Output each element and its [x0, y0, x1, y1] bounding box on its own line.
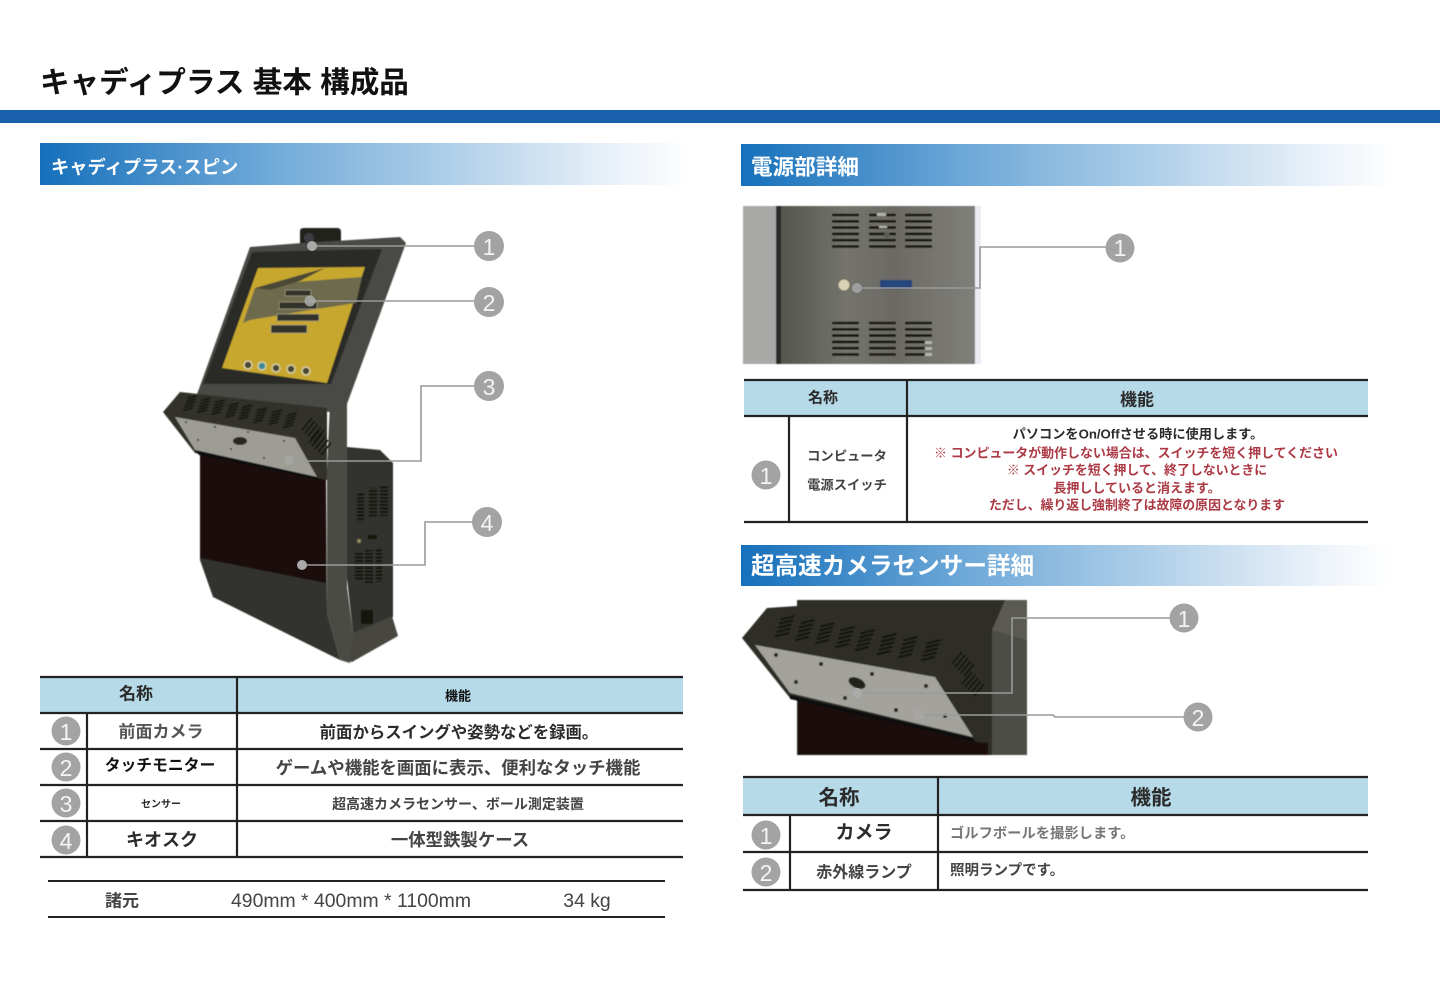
spec row: 34 kg	[563, 890, 611, 912]
table: camera sensor: 1	[760, 823, 772, 849]
table: kiosk components: 機能	[445, 688, 471, 704]
table: power switch: パソコンをOn/Offさせる時に使用します。	[1013, 426, 1263, 442]
callout badge: sensor 1	[1170, 604, 1198, 632]
table: kiosk components: センサー	[141, 798, 181, 810]
table: kiosk components: 前面からスイングや姿勢などを録画。	[320, 723, 598, 742]
callout badge 1: 1	[483, 234, 495, 260]
callout badge 4	[472, 507, 502, 537]
callout badge 2: 2	[483, 290, 495, 316]
lower body	[200, 453, 340, 660]
sensor vents	[183, 396, 331, 455]
table: power switch: ※ スイッチを短く押して、終了しないときに	[1007, 462, 1267, 478]
panel: camera sensor photo	[742, 600, 1184, 755]
table: kiosk components: タッチモニター	[105, 756, 215, 774]
table: kiosk components: 4	[60, 828, 73, 854]
table: kiosk components: 名称	[119, 684, 153, 704]
panel: left section heading	[40, 143, 692, 185]
panel: power section heading	[741, 144, 1395, 186]
side vents	[355, 486, 388, 624]
table: camera sensor	[743, 777, 1368, 890]
panel: kiosk photo	[163, 228, 406, 663]
icon: camera	[300, 228, 341, 247]
table: power switch	[744, 380, 1368, 522]
panel: power switch photo	[743, 206, 1106, 364]
table: power switch: 名称	[808, 388, 838, 406]
callout badge 3	[474, 371, 504, 401]
table: kiosk components: 2	[60, 755, 72, 781]
table: camera sensor: 2	[760, 860, 772, 886]
callout badge 3: 3	[483, 374, 495, 400]
panel: power section heading: 電源部詳細	[751, 154, 859, 180]
column	[327, 402, 353, 663]
table: camera sensor: ゴルフボールを撮影します。	[950, 824, 1134, 842]
spec row: 諸元	[105, 892, 139, 910]
sensor housing	[163, 392, 327, 480]
callout badge 4: 4	[481, 510, 494, 536]
base	[345, 616, 398, 662]
table: power switch: コンピュータ	[807, 448, 887, 464]
table: power switch: 長押ししていると消えます。	[1053, 480, 1221, 496]
screen	[222, 267, 365, 383]
sensor screws	[185, 421, 285, 459]
panel: camera sensor section heading: 超高速カメラセンサー詳細	[751, 553, 1034, 580]
table: camera sensor: 照明ランプです。	[950, 862, 1064, 879]
sensor housing	[742, 606, 992, 743]
screen icons	[244, 361, 310, 375]
table: camera sensor: 赤外線ランプ	[816, 862, 912, 882]
table: kiosk components	[40, 677, 683, 857]
callout badge: sensor 2: 2	[1192, 705, 1204, 731]
callout badge 1	[474, 231, 504, 261]
callout lines: kiosk	[284, 241, 476, 570]
table: kiosk components: 超高速カメラセンサー、ボール測定装置	[332, 796, 584, 812]
table: camera sensor: カメラ	[835, 822, 893, 844]
table: power switch: ※ コンピュータが動作しない場合は、スイッチを短く押してください	[934, 446, 1338, 460]
table: power switch: 1	[760, 463, 772, 489]
menu	[271, 290, 319, 333]
screws	[774, 653, 947, 718]
table: kiosk components: 3	[60, 791, 72, 817]
table: kiosk components: キオスク	[126, 830, 198, 850]
table: kiosk components: 1	[60, 719, 72, 745]
sensor plate	[755, 645, 973, 737]
spec row	[48, 881, 665, 917]
spec row: 490mm * 400mm * 1100mm	[231, 890, 471, 912]
side box	[345, 447, 393, 633]
vent highlights	[877, 213, 932, 356]
panel: camera sensor section heading	[741, 545, 1391, 586]
callout badge: power 1: 1	[1114, 235, 1126, 261]
bezel	[203, 249, 382, 384]
table: camera sensor: 名称	[818, 786, 860, 810]
callout badge: sensor 2	[1184, 702, 1212, 732]
table: power switch: 機能	[1120, 390, 1154, 410]
table: kiosk components: 一体型鉄製ケース	[391, 830, 529, 850]
table: kiosk components: ゲームや機能を画面に表示、便利なタッチ機能	[276, 758, 640, 778]
table: kiosk components: 前面カメラ	[118, 722, 204, 742]
panel: left section heading: キャディプラス·スピン	[51, 156, 238, 178]
sensor vents	[775, 616, 984, 696]
header bar	[0, 110, 1440, 123]
monitor frame	[197, 237, 406, 412]
callout badge: power 1	[1106, 234, 1134, 262]
title: キャディプラス 基本 構成品	[40, 66, 409, 100]
sensor plate	[175, 417, 317, 477]
callout badge: sensor 1: 1	[1178, 606, 1190, 632]
table: power switch: ただし、繰り返し強制終了は故障の原因となります	[989, 498, 1285, 512]
table: power switch: 電源スイッチ	[807, 478, 887, 492]
vents	[832, 215, 932, 354]
callout badge 2	[474, 287, 504, 317]
table: camera sensor: 機能	[1130, 786, 1172, 810]
